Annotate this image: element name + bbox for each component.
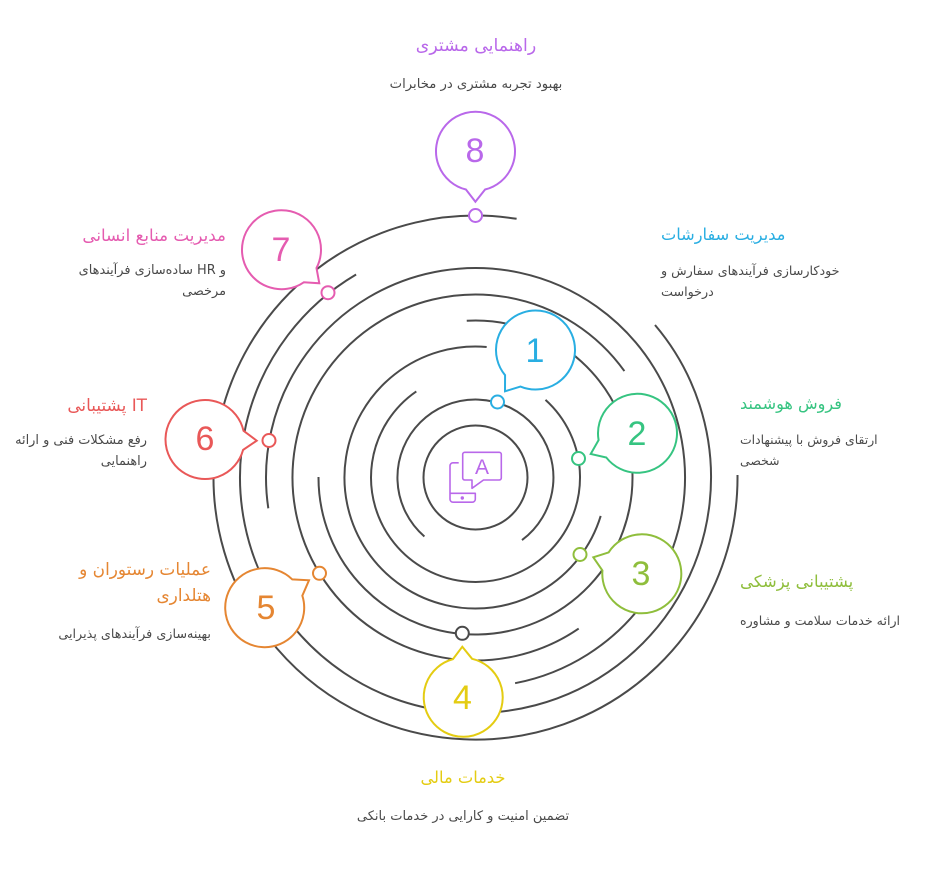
text block 6: IT پشتیبانی — [67, 395, 147, 415]
text block 4 — [357, 768, 569, 824]
concentric broken rings — [214, 216, 738, 740]
text block 5 — [58, 559, 211, 642]
text block 7 — [79, 225, 226, 298]
text block 8: راهنمایی مشتری — [416, 36, 536, 56]
bubble 5: 5 — [257, 589, 275, 627]
text block 1 — [660, 225, 840, 300]
text block 8 — [390, 36, 562, 92]
text block 1: درخواست — [661, 284, 714, 298]
text block 7: مدیریت منابع انسانی — [82, 225, 226, 245]
bubble 7: 7 — [272, 231, 290, 269]
text block 3 — [740, 572, 900, 628]
bubble 7 — [242, 210, 334, 299]
text block 2 — [740, 394, 878, 468]
text block 6: راهنمایی — [101, 454, 147, 468]
bubble 1 — [491, 311, 575, 408]
text block 7: مرخصی — [182, 284, 226, 298]
bubble 3: 3 — [632, 555, 650, 593]
bubble 8 — [436, 112, 515, 222]
text block 6: رفع مشکلات فنی و ارائه — [15, 433, 147, 448]
bubble 6 — [165, 400, 276, 479]
text block 3: پشتیبانی پزشکی — [740, 572, 853, 591]
text block 5: بهینه‌سازی فرآیندهای پذیرایی — [58, 627, 211, 642]
text block 2: شخصی — [740, 452, 779, 468]
icon: phone with speech bubble: A — [475, 456, 489, 479]
bubble 4 — [424, 627, 503, 737]
bubble 5 — [225, 567, 326, 647]
icon: phone with speech bubble — [450, 452, 501, 502]
text block 5: عملیات رستوران و — [79, 559, 211, 579]
bubble 4: 4 — [453, 679, 472, 717]
text block 2: فروش هوشمند — [740, 394, 842, 413]
bubble 8: 8 — [466, 132, 484, 170]
text block 2: ارتقای فروش با پیشنهادات — [740, 432, 878, 447]
text block 1: مدیریت سفارشات — [661, 225, 785, 244]
text block 4: خدمات مالی — [420, 768, 506, 787]
text block 1: خودکارسازی فرآیندهای سفارش و — [661, 263, 840, 278]
text block 8: بهبود تجربه مشتری در مخابرات — [390, 77, 562, 92]
text block 7: و HR ساده‌سازی فرآیندهای — [79, 263, 226, 278]
text block 6 — [15, 395, 147, 468]
bubble 2 — [572, 394, 677, 473]
bubble 6: 6 — [196, 420, 214, 458]
text block 3: ارائه خدمات سلامت و مشاوره — [740, 613, 900, 628]
bubble 2: 2 — [628, 415, 646, 453]
text block 5: هتلداری — [156, 585, 211, 605]
bubble 3 — [574, 534, 681, 613]
text block 4: تضمین امنیت و کارایی در خدمات بانکی — [357, 809, 569, 824]
bubble 1: 1 — [526, 332, 544, 370]
